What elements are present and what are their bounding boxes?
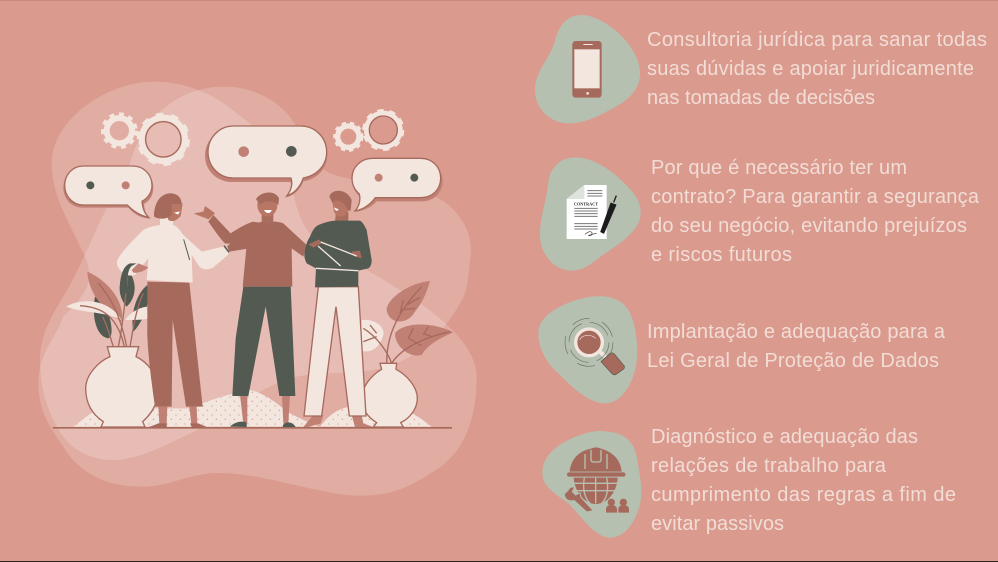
item 1: text: nas tomadas de decisões <box>647 87 875 109</box>
item 1: text: Consultoria jurídica para sanar todas <box>647 29 987 51</box>
item 3: text: Implantação e adequação para a <box>647 321 946 343</box>
item 3: text: Lei Geral de Proteção de Dados <box>647 350 939 372</box>
item 2: text <box>651 157 980 266</box>
ground line <box>53 427 452 429</box>
item 1: text: suas dúvidas e apoiar juridicamente <box>647 58 974 80</box>
item 3: text <box>647 321 946 372</box>
item 2: text: do seu negócio, evitando prejuízos <box>651 215 967 237</box>
background blob: inner <box>40 87 471 460</box>
person: man right <box>303 191 373 427</box>
speech bubble: right <box>352 158 443 212</box>
right plant <box>360 281 453 363</box>
speech bubble: left <box>63 166 153 219</box>
item 4: text: evitar passivos <box>651 513 784 535</box>
item 1: text <box>647 29 987 109</box>
icon: contract document: CONTRACT <box>574 202 598 207</box>
person: man center <box>194 193 307 427</box>
illustration: team conversation <box>38 82 477 496</box>
ground mound with dots <box>73 390 432 427</box>
item 2: text: Por que é necessário ter um <box>651 157 907 179</box>
item 2: blob and contract icon <box>540 157 641 271</box>
item 1: blob and phone icon <box>535 15 640 123</box>
item 3: blob and magnifier icon <box>538 296 637 403</box>
item 4: blob and worker icon <box>542 431 641 538</box>
gears <box>104 112 402 163</box>
item 4: text: cumprimento das regras a fim de <box>651 484 956 506</box>
right vase <box>362 363 417 427</box>
icon: magnifying glass <box>565 318 624 375</box>
person: woman <box>117 193 252 427</box>
icon: phone <box>572 41 602 98</box>
item 4: text: Diagnóstico e adequação das <box>651 426 918 448</box>
left vase <box>86 347 158 427</box>
icon: helmet globe wrench <box>564 447 629 513</box>
item 4: text: relações de trabalho para <box>651 455 887 477</box>
background blob: outer <box>38 82 477 496</box>
speech bubble: center <box>205 126 327 197</box>
item 2: text: e riscos futuros <box>651 244 792 266</box>
item 2: text: contrato? Para garantir a segurança <box>651 186 980 208</box>
left plant <box>66 268 148 347</box>
item 4: text <box>651 426 956 535</box>
